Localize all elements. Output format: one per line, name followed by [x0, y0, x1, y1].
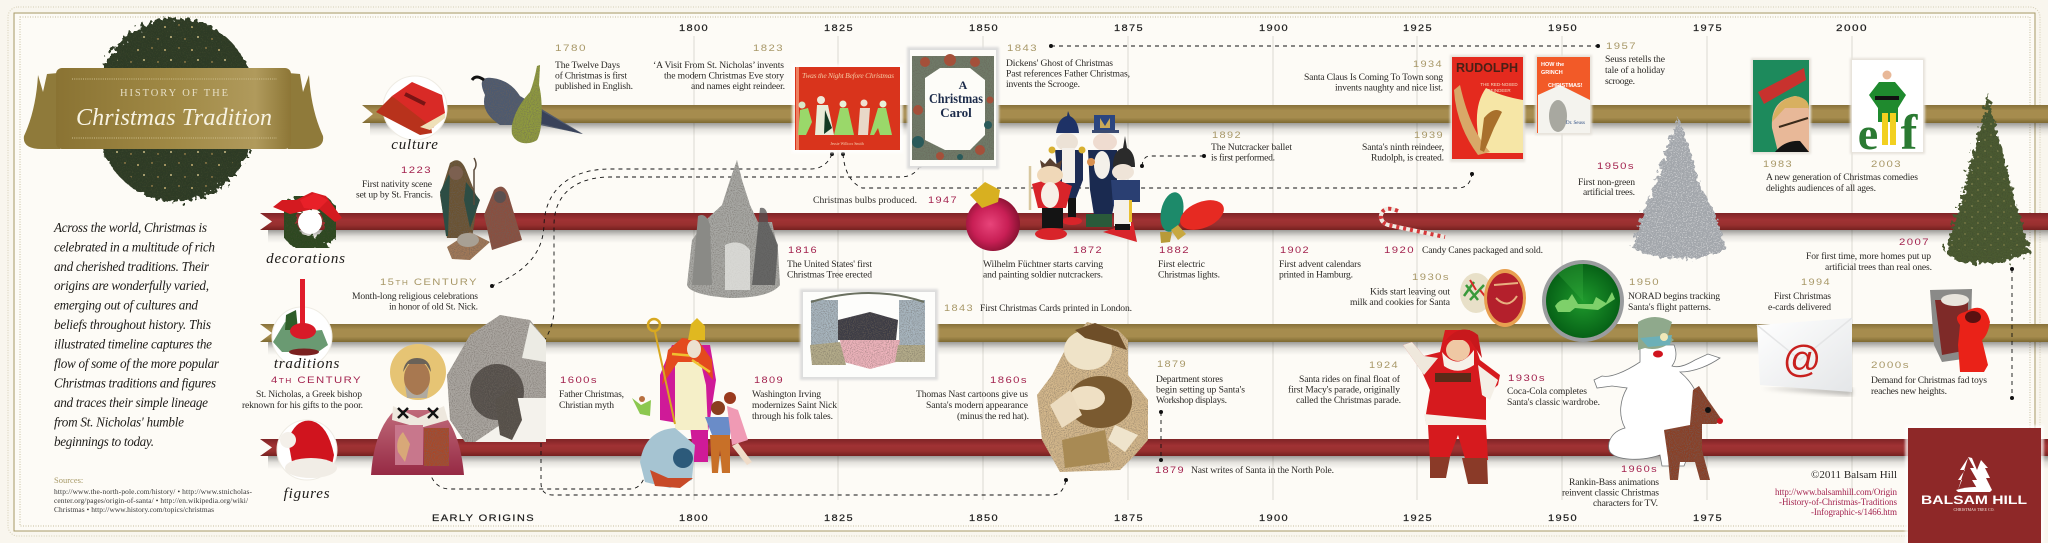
1983 and 2003 text: A new generation of Christmas comedies — [1766, 172, 1918, 183]
top year axis: 1900 — [1259, 23, 1289, 34]
Coca-Cola Santa — [1403, 330, 1500, 484]
1902 text: 1902 — [1280, 245, 1310, 256]
1960s text: reinvent classic Christmas — [1562, 488, 1659, 498]
1939 text: Santa's ninth reindeer, — [1362, 142, 1444, 153]
1957 text: scrooge. — [1605, 76, 1635, 87]
1957 text: 1957 — [1606, 41, 1637, 52]
Saint Nick with children — [632, 318, 752, 488]
1950 text — [1628, 277, 1720, 313]
1223 text: 1223 — [401, 165, 432, 176]
book: Rudolph — [1450, 55, 1525, 162]
1930s Coca-Cola text — [1507, 373, 1600, 408]
dashed connector lines — [427, 44, 2014, 495]
1823 text: the modern Christmas Eve story — [664, 70, 784, 82]
dvd: Elf: f — [1901, 104, 1919, 160]
1780 text: of Christmas is first — [555, 70, 627, 82]
1600s text — [559, 375, 624, 411]
top year axis: 1975 — [1693, 23, 1723, 34]
1882 text — [1158, 245, 1220, 280]
1960s text: Rankin-Bass animations — [1569, 477, 1659, 488]
1950s text: First non-green — [1578, 177, 1635, 188]
1879 Santa's Workshop text: Department stores — [1156, 374, 1223, 385]
ribbon: traditions — [260, 324, 2048, 355]
1882 text: 1882 — [1159, 245, 1190, 256]
1843 Dickens text: 1843 — [1007, 43, 1038, 54]
1843 Dickens text — [1006, 43, 1130, 90]
1879 Santa's Workshop text: Workshop displays. — [1156, 395, 1227, 406]
1924 text: called the Christmas parade. — [1296, 395, 1401, 406]
1816 tree engraving — [687, 160, 780, 298]
top year axis: 2000 — [1836, 23, 1868, 34]
icon: St. Nicholas icon — [371, 344, 464, 475]
intro paragraph: emerging out of cultures and — [54, 298, 198, 312]
2007 text: artificial trees than real ones. — [1825, 262, 1932, 273]
icon: decorations wreath — [273, 192, 342, 244]
copyright and URL: ©2011 Balsam Hill — [1811, 469, 1897, 481]
1939 text — [1362, 130, 1444, 164]
1879 North Pole text: Nast writes of Santa in the North Pole. — [1191, 465, 1334, 476]
1879 North Pole text: 1879 — [1155, 465, 1185, 476]
1780 text: The Twelve Days — [555, 60, 620, 71]
1994 text: e-cards delivered — [1768, 302, 1831, 313]
2000s text: Demand for Christmas fad toys — [1871, 375, 1987, 386]
1950 text: 1950 — [1629, 277, 1660, 288]
sources: http://www.the-north-pole.com/history/ • http://www.stnicholas- — [54, 487, 253, 496]
1994 text — [1768, 277, 1831, 313]
1823 text: ‘A Visit From St. Nicholas’ invents — [653, 60, 784, 71]
title line: history of the: HISTORY OF THE — [120, 88, 228, 99]
1809 text: modernizes Saint Nick — [752, 400, 837, 411]
intro paragraph: illustrated timeline captures the — [54, 336, 212, 352]
dvd: Elf: e — [1858, 108, 1878, 159]
nutcracker: rear left — [1048, 111, 1086, 225]
1957 text: tale of a holiday — [1605, 65, 1665, 76]
1930s Coca-Cola text: Santa's classic wardrobe. — [1507, 397, 1600, 408]
1809 text: through his folk tales. — [752, 411, 833, 422]
1924 text: 1924 — [1369, 360, 1399, 371]
Father Christmas engraving — [447, 315, 546, 442]
1860s text: 1860s — [990, 375, 1028, 386]
title banner — [24, 68, 323, 149]
1957 text — [1605, 41, 1665, 87]
1950s text: 1950s — [1597, 161, 1635, 172]
1983 and 2003 text: 1983 — [1763, 159, 1793, 170]
2000s text: reaches new heights. — [1871, 386, 1947, 397]
bottom year axis: 1800 — [679, 513, 709, 524]
book: Twas the Night Before Christmas: Jessie Willcox Smith — [830, 141, 864, 146]
bottom year axis: 1850 — [969, 513, 999, 524]
book: Twas the Night Before Christmas: Twas the Night Before Christmas — [802, 71, 894, 80]
1960s text — [1562, 464, 1659, 509]
1983 and 2003 text: 2003 — [1871, 159, 1902, 170]
1872 text: Wilhelm Füchtner starts carving — [983, 259, 1103, 270]
1816 text: Christmas Tree erected — [787, 270, 872, 280]
1934 text — [1304, 59, 1443, 94]
4th century text: St. Nicholas, a Greek bishop — [256, 389, 362, 400]
1860s text — [916, 375, 1029, 422]
1809 text: 1809 — [754, 375, 784, 386]
1983 and 2003 text — [1763, 159, 1918, 194]
top year axis — [679, 23, 1868, 34]
bottom year axis: 1900 — [1259, 513, 1289, 524]
1872 text: 1872 — [1073, 245, 1103, 256]
top year axis: 1950 — [1548, 23, 1578, 34]
bottom year axis: 1925 — [1403, 513, 1433, 524]
1843 Christmas card — [800, 289, 938, 380]
bottom year axis — [432, 513, 1723, 524]
1843 Dickens text: invents the Scrooge. — [1006, 79, 1080, 90]
icon: ornament — [966, 182, 1020, 251]
4th century text: 4TH CENTURY — [271, 375, 362, 386]
1960s text: characters for TV. — [1593, 498, 1658, 509]
copyright and URL: http://www.balsamhill.com/Origin — [1775, 487, 1898, 497]
1947 bulbs text: 1947 — [928, 195, 958, 206]
1879 Santa's Workshop text: begin setting up Santa's — [1156, 384, 1245, 396]
1934 text: invents naughty and nice list. — [1335, 82, 1443, 94]
Nast Santa illustration — [1037, 322, 1148, 472]
intro paragraph: from St. Nicholas' humble — [54, 414, 184, 430]
1809 text: Washington Irving — [752, 389, 821, 400]
icon: Santa hat — [277, 420, 337, 480]
1823 text: and names eight reindeer. — [691, 81, 785, 92]
1223 text: set up by St. Francis. — [356, 190, 433, 200]
1860s text: (minus the red hat). — [957, 411, 1029, 422]
bottom year axis: 1975 — [1693, 513, 1723, 524]
label: traditions: traditions — [274, 356, 340, 372]
nutcracker: red king — [1030, 158, 1072, 240]
top year axis: 1925 — [1403, 23, 1433, 34]
2007 text — [1806, 237, 1932, 273]
top year axis: 1850 — [969, 23, 999, 34]
icon: nativity figures — [440, 158, 522, 260]
1600s text: Father Christmas, — [559, 389, 624, 400]
book: Rudolph: RUDOLPH — [1456, 60, 1518, 75]
book: How the Grinch Stole Christmas: CHRISTMAS! — [1548, 83, 1583, 89]
Frosty the Snowman — [1594, 317, 1720, 466]
1920 text: Candy Canes packaged and sold. — [1422, 245, 1543, 256]
icon: quail and pear — [472, 65, 583, 143]
bottom year axis: 1875 — [1114, 513, 1144, 524]
1892 text: is first performed. — [1211, 152, 1275, 164]
copyright and URL: -History-of-Christmas-Traditions — [1779, 497, 1897, 507]
book: A Christmas Carol: Carol — [940, 105, 972, 120]
icon: light bulbs — [1157, 190, 1228, 243]
icon: NORAD radar — [1542, 260, 1624, 342]
sources: center.org/pages/origin-of-santa/ • http://en.wikipedia.org/wiki/ — [54, 496, 249, 505]
book: How the Grinch Stole Christmas: HOW the — [1541, 62, 1564, 68]
1930s cookies text: Kids start leaving out — [1370, 286, 1450, 298]
1960s text: 1960s — [1621, 464, 1658, 475]
1994 text: 1994 — [1801, 277, 1831, 288]
1930s cookies text: milk and cookies for Santa — [1350, 297, 1451, 308]
book: Rudolph: THE RED-NOSED — [1480, 82, 1518, 87]
15th century text: Month-long religious celebrations — [352, 291, 478, 302]
1930s Coca-Cola text: Coca-Cola completes — [1507, 386, 1587, 397]
1930s cookies text — [1350, 272, 1451, 308]
1223 text — [356, 165, 433, 200]
intro paragraph — [53, 220, 220, 449]
sources: Sources: — [54, 475, 83, 485]
intro paragraph: Across the world, Christmas is — [53, 220, 207, 235]
vertical year gridlines — [694, 36, 1852, 500]
bottom year axis: EARLY ORIGINS — [432, 513, 535, 524]
1934 text: 1934 — [1413, 59, 1443, 70]
1872 text: and painting soldier nutcrackers. — [983, 270, 1103, 280]
sources — [54, 475, 253, 514]
sources: Christmas • http://www.history.com/topics/christmas — [54, 505, 214, 514]
intro paragraph: and cherished traditions. Their — [54, 259, 210, 274]
1823 text: 1823 — [753, 43, 784, 54]
2007 text: 2007 — [1899, 237, 1930, 248]
1924 text: Santa rides on final float of — [1299, 374, 1401, 385]
1939 text: Rudolph, is created. — [1371, 152, 1444, 164]
1860s text: Santa's modern appearance — [926, 400, 1028, 411]
1816 text — [787, 245, 872, 280]
1843 cards text: 1843 — [944, 303, 974, 314]
1879 Santa's Workshop text: 1879 — [1157, 359, 1187, 370]
book: A Christmas Carol: Christmas — [929, 92, 983, 107]
title line: christmas tradition: Christmas Tradition — [76, 105, 272, 131]
1860s text: Thomas Nast cartoons give us — [916, 389, 1028, 400]
1957 text: Seuss retells the — [1605, 54, 1665, 65]
intro paragraph: flow of some of the more popular — [54, 356, 220, 371]
label: culture: culture — [391, 137, 439, 153]
1892 text: The Nutcracker ballet — [1211, 142, 1292, 153]
1950s text — [1578, 161, 1635, 198]
intro paragraph: and traces their simple lineage — [54, 395, 208, 410]
1780 text: 1780 — [555, 43, 587, 54]
nutcracker: helmet soldier — [1103, 136, 1140, 242]
bottom year axis: 1825 — [824, 513, 854, 524]
dvd: Elf — [1850, 58, 1925, 160]
1816 text: 1816 — [788, 245, 818, 256]
1920 text: 1920 — [1384, 245, 1415, 256]
Balsam Hill logo — [1905, 425, 2044, 543]
bottom year axis: 1950 — [1548, 513, 1578, 524]
1930s Coca-Cola text: 1930s — [1508, 373, 1546, 384]
2000s text — [1871, 360, 1987, 397]
1843 Dickens text: Past references Father Christmas, — [1006, 68, 1130, 80]
icon: traditions candle — [272, 279, 332, 367]
top year axis: 1800 — [679, 23, 709, 34]
1950s text: artificial trees. — [1583, 187, 1635, 198]
Rudolph the reindeer — [1664, 386, 1723, 480]
Balsam Hill logo: CHRISTMAS TREE CO. — [1954, 508, 1995, 512]
icon: e-card envelope — [1757, 318, 1852, 396]
top year axis: 1875 — [1114, 23, 1144, 34]
1879 Santa's Workshop text — [1156, 359, 1245, 406]
copyright and URL — [1775, 469, 1898, 517]
1939 text: 1939 — [1414, 130, 1444, 141]
icon: Elmo toy — [1930, 289, 1990, 372]
icon: cookies — [1460, 269, 1526, 327]
1994 text: First Christmas — [1774, 291, 1831, 302]
4th century text: reknown for his gifts to the poor. — [242, 400, 363, 411]
1924 text — [1288, 360, 1401, 406]
1780 text — [555, 43, 633, 92]
1843 cards text: First Christmas Cards printed in London. — [980, 303, 1132, 314]
1872 text — [983, 245, 1103, 280]
book: A Christmas Carol — [907, 47, 999, 169]
intro paragraph: Christmas traditions and figures — [54, 376, 216, 390]
1924 text: first Macy's parade, originally — [1288, 384, 1400, 396]
icon: e-card envelope: @ — [1783, 339, 1821, 381]
Balsam Hill logo: BALSAM HILL — [1921, 493, 2027, 507]
1882 text: Christmas lights. — [1158, 270, 1220, 280]
silver tree — [1632, 117, 1726, 258]
book: Rudolph: REINDEER — [1487, 88, 1511, 93]
1809 text — [752, 375, 837, 422]
15th century text: 15 TH CENTURY — [380, 277, 478, 288]
1600s text: Christian myth — [559, 400, 614, 411]
intro paragraph: beginnings to today. — [54, 434, 154, 449]
1950 text: Santa's flight patterns. — [1628, 302, 1711, 313]
4th century text — [242, 375, 363, 411]
1780 text: published in English. — [555, 81, 633, 92]
2000s text: 2000s — [1871, 360, 1910, 371]
ribbon: culture — [362, 105, 2048, 136]
icon: culture books — [376, 76, 447, 140]
icon: big green tree — [1945, 92, 2030, 264]
label: decorations: decorations — [266, 251, 346, 267]
1947 bulbs text: Christmas bulbs produced. — [813, 195, 917, 206]
icon: title wreath — [94, 18, 258, 202]
ribbon: decorations — [260, 213, 2048, 243]
nutcracker: rear right — [1086, 115, 1119, 227]
intro paragraph: beliefs throughout history. This — [54, 317, 211, 332]
icon: candy cane — [1381, 209, 1445, 237]
1902 text — [1279, 245, 1361, 280]
book: How the Grinch Stole Christmas — [1535, 55, 1592, 135]
1950 text: NORAD begins tracking — [1628, 291, 1720, 302]
1983 and 2003 text: delights audiences of all ages. — [1766, 183, 1876, 194]
label: figures: figures — [284, 486, 330, 502]
ribbon: figures — [260, 439, 2048, 469]
icon: nutcrackers — [1030, 111, 1140, 242]
book: A Christmas Carol: A — [959, 78, 968, 92]
dvd: A Christmas Story — [1751, 58, 1811, 154]
intro paragraph: celebrated in a multitude of rich — [54, 240, 215, 254]
15th century text — [352, 277, 478, 312]
1882 text: First electric — [1158, 259, 1205, 270]
1823 text — [653, 43, 785, 92]
top year axis: 1825 — [824, 23, 854, 34]
1816 text: The United States' first — [787, 259, 872, 270]
2007 text: For first time, more homes put up — [1806, 251, 1931, 262]
book: How the Grinch Stole Christmas: Dr. Seuss — [1566, 121, 1585, 126]
1843 Dickens text: Dickens' Ghost of Christmas — [1006, 58, 1113, 69]
book: Twas the Night Before Christmas — [792, 64, 903, 153]
1223 text: First nativity scene — [362, 179, 432, 190]
1600s text: 1600s — [560, 375, 598, 386]
copyright and URL: -Infographic-s/1466.htm — [1811, 507, 1897, 517]
1930s cookies text: 1930s — [1412, 272, 1450, 283]
1934 text: Santa Claus Is Coming To Town song — [1304, 72, 1443, 83]
intro paragraph: origins are wonderfully varied, — [54, 278, 209, 293]
15th century text: in honor of old St. Nick. — [389, 302, 478, 312]
book: How the Grinch Stole Christmas: GRINCH — [1541, 70, 1563, 76]
1892 text — [1211, 130, 1292, 164]
1892 text: 1892 — [1212, 130, 1242, 141]
1902 text: First advent calendars — [1279, 259, 1361, 270]
1902 text: printed in Hamburg. — [1279, 270, 1353, 280]
